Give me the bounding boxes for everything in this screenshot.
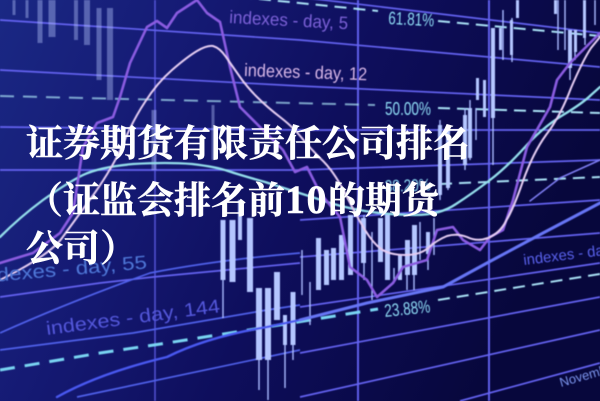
title (26, 124, 470, 270)
chart labels: 50.00% (385, 99, 431, 119)
title line 1: 证券期货有限责任公司排名 (26, 124, 470, 165)
chart labels: indexes - day, 144 (45, 296, 222, 340)
chart labels: indexes - day, 12 (244, 60, 367, 84)
title line 3: 公司） (26, 229, 137, 270)
title line 2: （证监会排名前10的期货 (26, 177, 439, 222)
chart labels: indexes - day, 5 (229, 7, 349, 33)
chart labels: 38.20% (384, 175, 431, 196)
chart labels: 61.81% (388, 8, 435, 30)
chart labels: 23.88% (383, 296, 431, 321)
